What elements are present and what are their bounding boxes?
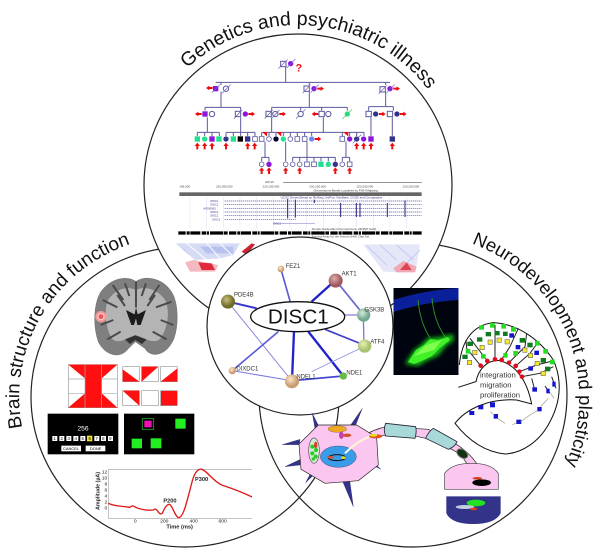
ERP amplitude chart: 4	[105, 493, 108, 499]
node: PDE4B: PDE4B	[234, 293, 254, 299]
dendrite spikes	[282, 408, 381, 507]
postsynaptic terminal	[446, 496, 501, 524]
pedigree: generation 4	[195, 132, 395, 143]
node: DIXDC1: DIXDC1	[236, 366, 259, 372]
yellow cells	[467, 338, 545, 376]
heading: neurodevelopment and plasticity: Neurodevelopment and plasticity	[473, 232, 592, 468]
blue cells	[469, 333, 556, 424]
labels: integration, migration, proliferation: integration	[480, 370, 516, 379]
small red pattern options	[123, 367, 177, 406]
presynaptic terminal	[445, 463, 498, 489]
node: NDE1: NDE1	[346, 370, 363, 376]
scale labels: 220,200,000	[357, 185, 374, 189]
scale labels: Illumina Array for the Human (HM) Chip Set	[312, 234, 369, 238]
digit span task screen: 8	[102, 436, 105, 441]
mitochondrial cluster	[309, 438, 319, 463]
node: DIXDC1	[229, 366, 259, 374]
axon	[368, 427, 477, 463]
scale labels: UCSC Genes Based on RefSeq, UniProt, GenBank, CCDS and Comparative	[281, 195, 383, 199]
linkage disequilibrium heatmap right	[363, 244, 420, 272]
node: GSK3B	[357, 307, 384, 322]
pedigree: red arrows	[195, 86, 407, 174]
ERP amplitude chart: 6	[105, 487, 108, 493]
migrating neuron tails	[490, 393, 554, 425]
SNP density bar	[178, 228, 422, 238]
heading: genetics and psychiatric illness: Genetics and psychiatric illness	[181, 11, 434, 88]
red dividing cells	[478, 357, 524, 379]
scale labels: 220,100,000	[263, 185, 280, 189]
chromosome band	[179, 192, 422, 196]
scale labels: 146,000	[179, 185, 190, 189]
ERP amplitude chart: 10	[102, 475, 108, 481]
question mark: ?	[296, 62, 302, 74]
circle: DISC1 interaction network	[207, 237, 393, 415]
ERP amplitude chart: 200	[160, 519, 169, 525]
faint grid	[190, 197, 407, 228]
spatial span task screen	[124, 414, 194, 454]
digit span task screen: 6	[88, 436, 91, 441]
ERP amplitude chart: 0	[134, 519, 137, 525]
node: NDEL1	[285, 374, 316, 388]
vesicle in axon	[455, 447, 470, 460]
myelin sheaths	[384, 423, 457, 449]
labels: integration, migration, proliferation: migration	[480, 380, 511, 389]
DISC1 central node	[251, 302, 345, 332]
gene labels: AY000000	[203, 206, 216, 210]
axonal cargo	[369, 434, 382, 438]
large red pattern grid	[68, 365, 117, 408]
scale labels: 220,150,000	[309, 185, 326, 189]
gene labels: DISC1	[210, 214, 219, 218]
digit span task screen: 7	[95, 436, 98, 441]
pedigree: generation 3	[202, 109, 400, 119]
digit span task screen: 5	[81, 436, 84, 441]
gene labels: DISC1	[210, 199, 219, 203]
circle: brain structure and function	[31, 247, 339, 547]
circle: neurodevelopment and plasticity	[259, 243, 567, 547]
ERP amplitude chart: 8	[105, 481, 108, 487]
pedigree: founders	[278, 59, 295, 69]
coronal MRI brain slice	[95, 278, 177, 355]
node: FEZ1	[278, 264, 301, 272]
golgi and organelles	[328, 426, 351, 439]
neurodevelopment diagram: hippocampal niche	[455, 323, 559, 454]
dark green cells	[462, 331, 550, 371]
fluorescence micrograph of neurons	[394, 288, 458, 375]
node: AKT1: AKT1	[342, 271, 357, 277]
pedigree: generation 2	[212, 85, 395, 94]
ERP amplitude chart: P300	[195, 477, 208, 483]
gene transcripts	[225, 199, 422, 223]
gene labels: DISC1	[210, 210, 219, 214]
node: GSK3B: GSK3B	[364, 307, 384, 313]
scale labels: 220,250,000	[403, 185, 420, 189]
digit span task screen: 256	[77, 426, 89, 433]
scale labels: Simple Nucleotide Polymorphisms (dbSNP build)	[312, 227, 376, 231]
scale labels: Chromosome Bands Localized by FISH Mapping	[313, 189, 378, 193]
pedigree: generation 5	[259, 162, 352, 167]
digit span task screen: 2	[60, 436, 63, 441]
node: AKT1	[329, 271, 357, 288]
niche outline	[455, 323, 559, 454]
digit span task screen: CANCEL	[63, 446, 80, 451]
scale labels	[179, 180, 420, 238]
digit span task screen: DONE	[90, 446, 102, 451]
digit span task screen: 4	[74, 436, 77, 441]
heading: brain structure and function: Brain structure and function	[5, 236, 130, 428]
bright green cells	[466, 323, 555, 364]
node: FEZ1: FEZ1	[286, 264, 301, 270]
ERP amplitude chart: Amplitude (µA)	[96, 472, 102, 510]
digit span task screen: 1	[53, 436, 56, 441]
gene labels	[203, 199, 282, 225]
digit span task screen	[48, 414, 118, 454]
ERP amplitude chart: 400	[189, 519, 198, 525]
ERP amplitude chart: Time (ms)	[166, 525, 193, 531]
DISC1 central node: DISC1	[268, 305, 329, 328]
ERP amplitude chart: 12	[102, 469, 108, 475]
ERP amplitude chart	[96, 469, 252, 531]
labels: integration, migration, proliferation: proliferation	[480, 391, 520, 400]
circle: genetics and psychiatric illness	[144, 34, 452, 336]
scale labels: 200 kb	[265, 180, 274, 184]
nucleus	[320, 446, 356, 467]
scale labels: 220,050,000	[216, 185, 233, 189]
microtubule highlight	[345, 436, 372, 453]
ERP amplitude chart: 2	[105, 499, 108, 505]
pedigree chart	[195, 59, 407, 174]
neuron diagram	[282, 408, 501, 524]
genome browser track	[178, 180, 422, 238]
gene labels: DISC1	[273, 221, 282, 225]
radial processes	[466, 325, 556, 393]
node: ATF4	[358, 339, 385, 353]
ERP amplitude chart: 0	[105, 505, 108, 511]
soma	[299, 425, 378, 483]
DISC1 network	[221, 264, 385, 388]
linkage disequilibrium heatmap left	[175, 243, 255, 272]
ERP amplitude chart: P200	[163, 498, 177, 504]
gene labels: DISC1	[212, 217, 221, 221]
gene labels: DISC1	[210, 202, 219, 206]
node: NDEL1: NDEL1	[296, 375, 316, 381]
node: NDE1	[340, 370, 363, 380]
digit span task screen: 3	[67, 436, 70, 441]
node: PDE4B	[221, 293, 254, 309]
labels: integration, migration, proliferation	[480, 370, 520, 400]
brain structure panels	[48, 278, 252, 531]
node: ATF4: ATF4	[370, 340, 385, 346]
digit span task screen: 9	[109, 436, 112, 441]
ERP amplitude chart: 600	[218, 519, 227, 525]
network edges	[228, 269, 364, 381]
